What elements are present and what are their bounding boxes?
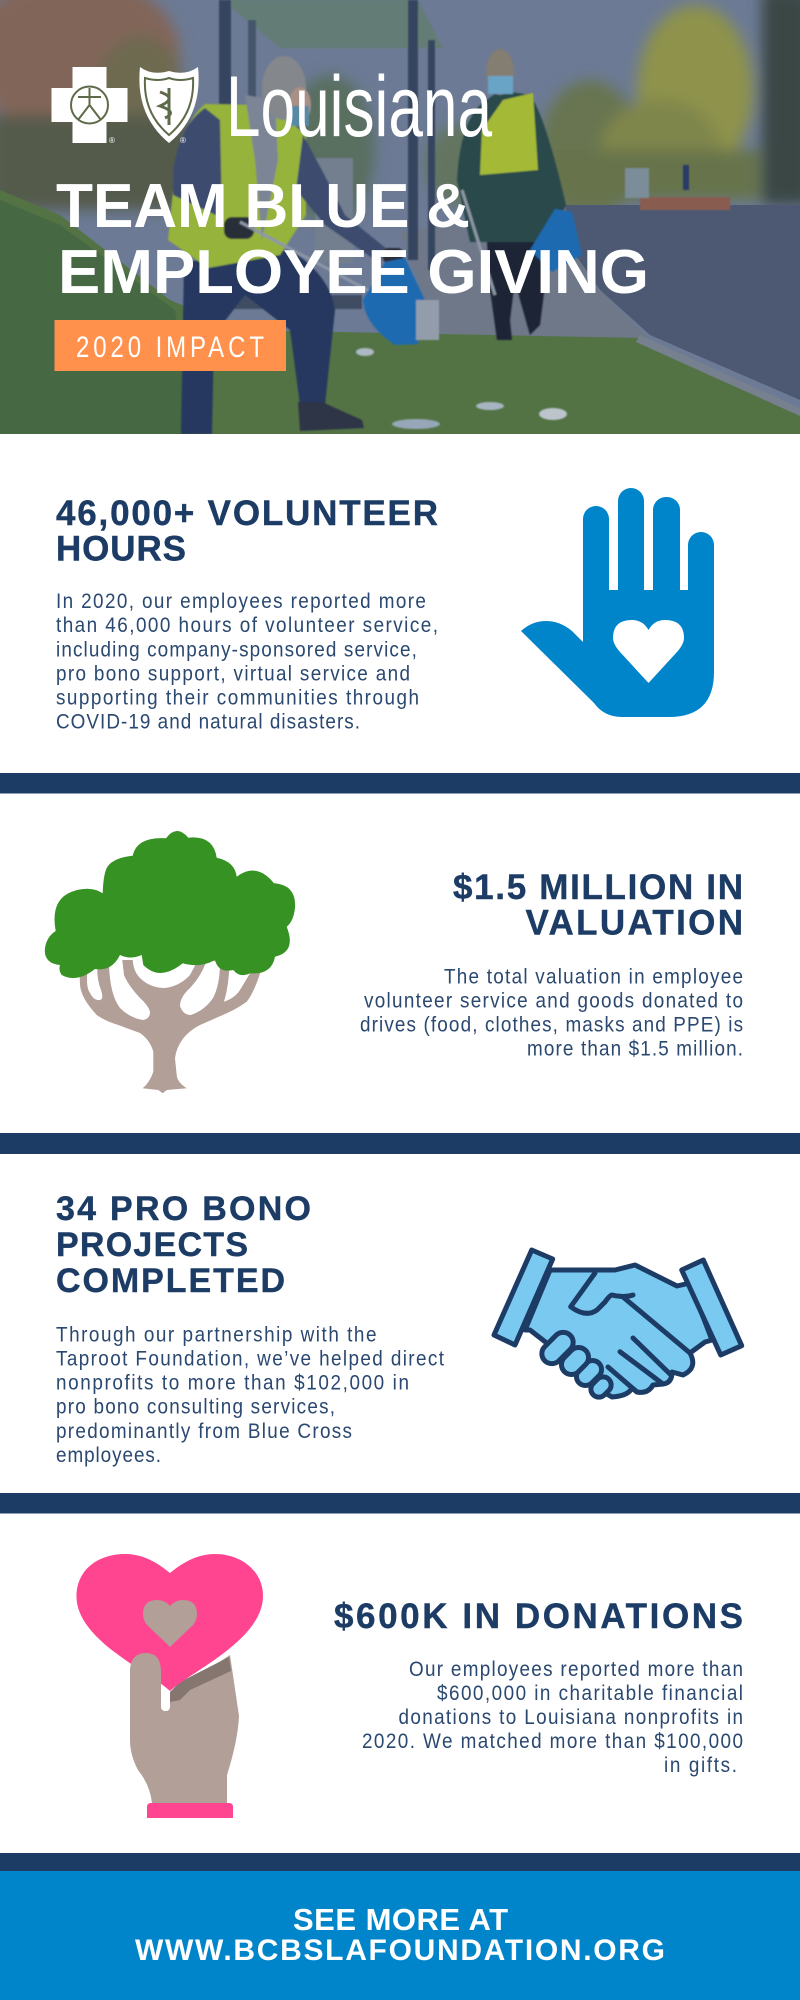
man: shoe [298, 402, 364, 431]
footer call to action: WWW.BCBSLAFOUNDATION.ORG [135, 1934, 665, 1967]
logo: cross and shield with Louisiana wordmark [52, 59, 492, 155]
footer call to action [135, 1902, 665, 1967]
text block: Our employees reported more than [409, 1658, 743, 1681]
panel: donations [76, 1554, 743, 1818]
text block: more than $1.5 million. [527, 1038, 743, 1061]
text block: drives (food, clothes, masks and PPE) is [360, 1014, 743, 1037]
heading: VALUATION [526, 904, 743, 942]
heading: 46,000+ VOLUNTEER [56, 494, 438, 533]
icon: cross [52, 67, 128, 145]
icon: hand with heart [521, 488, 714, 717]
text block: pro bono consulting services, [56, 1396, 335, 1419]
text block: pro bono support, virtual service and [56, 663, 410, 686]
title: TEAM BLUE & [56, 172, 470, 241]
man: jeans [181, 250, 335, 434]
pavement [400, 205, 650, 340]
woman: legs [487, 242, 548, 340]
panel: pro bono projects [56, 1190, 742, 1467]
text block: In 2020, our employees reported more [56, 590, 426, 613]
icon: cross: ® [109, 136, 115, 145]
man's rubbish bag [363, 258, 425, 345]
text block: Taproot Foundation, we’ve helped direct [56, 1348, 444, 1371]
text block [362, 1658, 743, 1777]
icon: tree [45, 831, 295, 1093]
footer banner [0, 1871, 800, 2000]
text block: supporting their communities through [56, 687, 419, 710]
text block: 2020. We matched more than $100,000 [362, 1730, 743, 1753]
text block: donations to Louisiana nonprofits in [398, 1706, 743, 1729]
header photo: volunteers collecting litter [0, 0, 800, 434]
man: vest [168, 104, 306, 268]
road [565, 205, 800, 400]
heading [56, 1190, 311, 1300]
title: EMPLOYEE GIVING [58, 238, 649, 307]
heading: COMPLETED [56, 1262, 285, 1300]
woman's rubbish bag [530, 209, 582, 272]
panel: valuation [45, 831, 743, 1093]
badge: 2020 impact: 2020 IMPACT [76, 329, 264, 364]
text block [360, 966, 743, 1061]
woman: vest [480, 93, 538, 175]
heading [453, 868, 743, 942]
heading: $1.5 MILLION IN [453, 868, 743, 907]
bus shelter [222, 0, 443, 48]
text block: predominantly from Blue Cross [56, 1420, 352, 1443]
divider bar [0, 1493, 800, 1514]
icon: shield: ® [180, 136, 186, 145]
panel: volunteer hours [56, 488, 714, 734]
text block: employees. [56, 1444, 161, 1467]
heading: 34 PRO BONO [56, 1190, 311, 1228]
title [56, 172, 649, 307]
heading: $600K IN DONATIONS [334, 1597, 743, 1636]
divider bar [0, 1133, 800, 1154]
text block [56, 590, 438, 734]
text block: volunteer service and goods donated to [364, 990, 743, 1013]
icon: shield [139, 67, 199, 145]
text block [56, 1324, 444, 1467]
text block: than 46,000 hours of volunteer service, [56, 614, 438, 637]
man: jacket arms [173, 108, 222, 218]
text block: The total valuation in employee [444, 966, 743, 989]
footer call to action: SEE MORE AT [293, 1902, 508, 1937]
icon: handshake [494, 1250, 742, 1400]
woman: coat [457, 90, 566, 242]
man: gloves [224, 217, 254, 239]
badge: 2020 impact [54, 320, 286, 371]
heading [56, 494, 438, 568]
heading: HOURS [56, 530, 186, 568]
icon: hand holding heart [76, 1554, 263, 1818]
heading: PROJECTS [56, 1226, 248, 1264]
divider bar [0, 773, 800, 794]
litter [476, 402, 504, 410]
grass [0, 190, 800, 434]
text block: nonprofits to more than $102,000 in [56, 1372, 409, 1395]
text block: in gifts. [664, 1754, 737, 1777]
text block: Through our partnership with the [56, 1324, 376, 1347]
text block: COVID-19 and natural disasters. [56, 711, 360, 734]
divider bar [0, 1853, 800, 1871]
text block: including company-sponsored service, [56, 639, 417, 662]
wordmark: Louisiana [226, 59, 492, 155]
text block: $600,000 in charitable financial [437, 1682, 743, 1705]
